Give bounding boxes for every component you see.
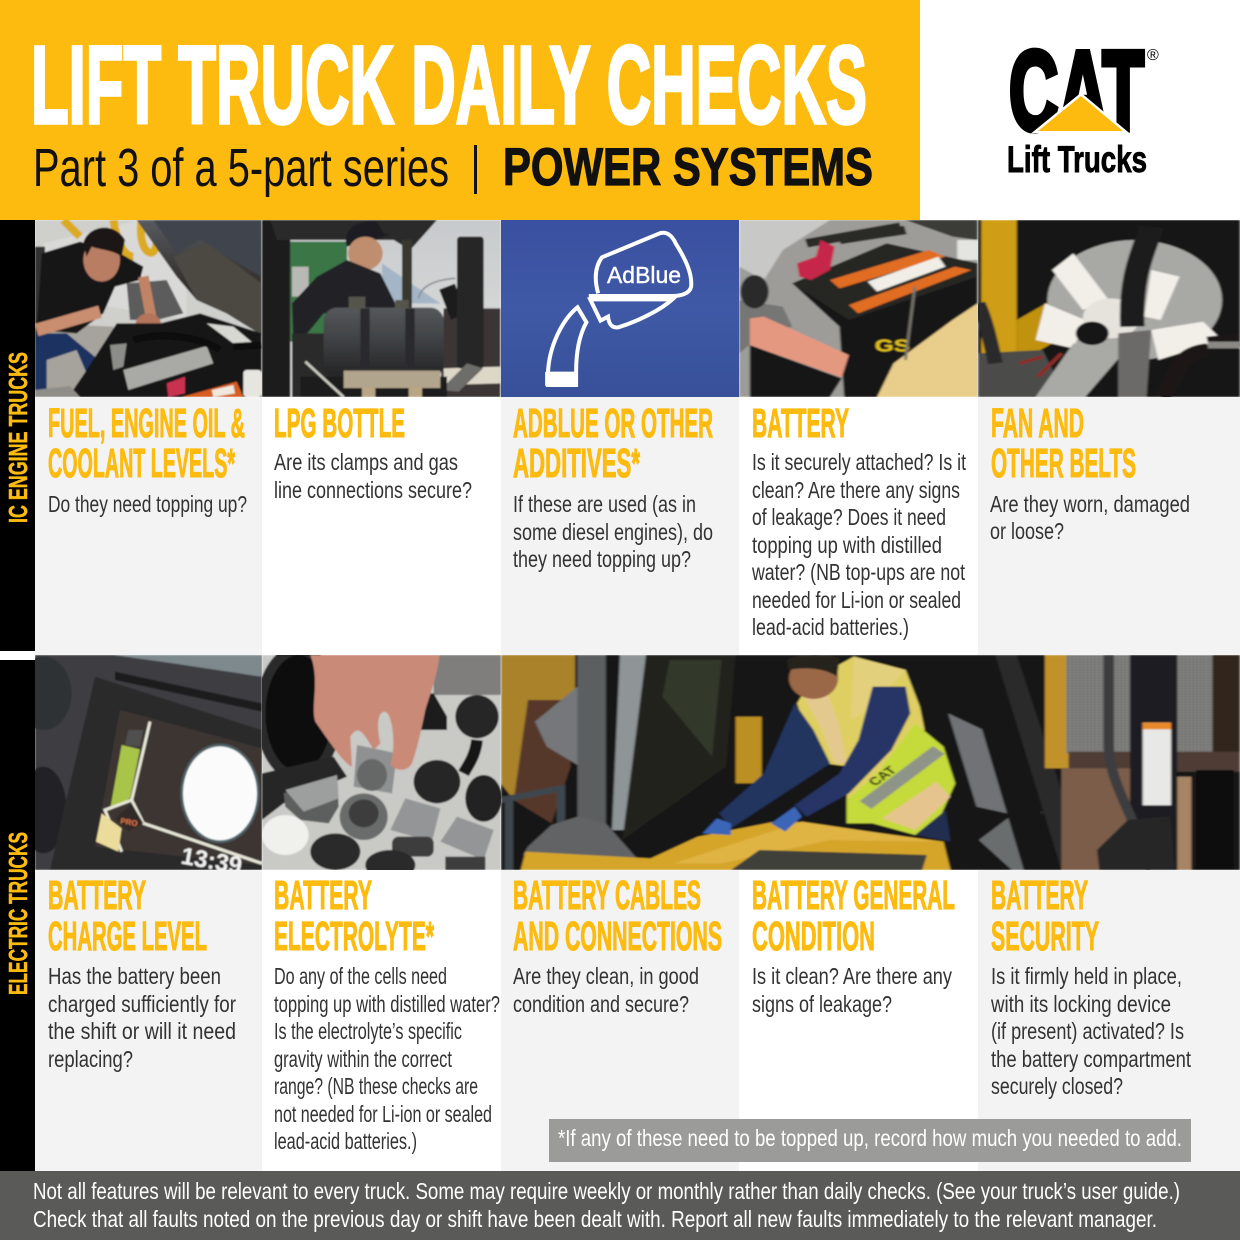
panel: fuel, engine oil and coolant levels: COOLANT LEVELS*: [48, 440, 235, 486]
panel: battery electrolyte: [274, 872, 500, 1154]
panel: battery security: SECURITY: [991, 913, 1099, 959]
panel: battery cables and connections: AND CONNECTIONS: [513, 913, 722, 959]
subtitle: series part: Part 3 of a 5-part series: [33, 138, 449, 198]
panel: battery charge level: CHARGE LEVEL: [48, 913, 207, 959]
logo triangle: [1038, 96, 1123, 131]
panel: battery charge level: Has the battery been: [48, 963, 221, 989]
panel: fuel, engine oil and coolant levels: Do they need topping up?: [48, 491, 247, 517]
panel: battery security: BATTERY: [991, 872, 1088, 918]
panel: AdBlue or other additives: ADBLUE OR OTHER: [513, 400, 713, 446]
panel: battery charge level: [48, 872, 236, 1072]
panel: AdBlue or other additives: If these are used (as in: [513, 491, 696, 517]
panel: battery security: the battery compartment: [991, 1046, 1191, 1072]
photo: battery charge display: [35, 655, 262, 880]
photo: battery charge display: 13:39: [179, 843, 244, 880]
registered mark: ®: [1147, 47, 1159, 64]
panel: AdBlue or other additives: they need topping up?: [513, 546, 691, 572]
photo: driver beside LPG bottle: [262, 220, 501, 397]
panel: battery cables and connections: condition and secure?: [513, 991, 689, 1017]
icon: filler spout: [548, 307, 586, 385]
icon: AdBlue jug body: [589, 233, 691, 296]
panel: battery cables and connections: Are they clean, in good: [513, 963, 699, 989]
panel: battery security: with its locking device: [990, 991, 1171, 1017]
panel: battery electrolyte: gravity within the correct: [274, 1046, 452, 1072]
panel: battery security: (if present) activated? Is: [991, 1018, 1184, 1044]
photo: worker checking battery cables (wide): [501, 655, 1240, 870]
photo: lead-acid battery in engine bay: [739, 220, 978, 397]
panel: text cells, IC engine row: FUEL, ENGINE OIL &: [48, 400, 245, 446]
panel: battery: clean? Are there any signs: [752, 477, 960, 503]
icon text: AdBlue: AdBlue: [607, 262, 681, 288]
panel: battery: BATTERY: [752, 400, 849, 446]
photo: technician checking engine levels: [35, 220, 262, 397]
panel: battery charge level: replacing?: [48, 1046, 133, 1072]
photo: lead-acid battery in engine bay: GS: [875, 337, 910, 356]
panel: AdBlue or other additives: ADDITIVES*: [513, 440, 640, 486]
panel: battery charge level: the shift or will it need: [48, 1018, 236, 1044]
panel: battery: topping up with distilled: [752, 532, 942, 558]
panel: battery electrolyte: Do any of the cells need: [274, 963, 447, 989]
panel: LPG bottle: LPG BOTTLE: [274, 400, 405, 446]
panel: battery electrolyte: ELECTROLYTE*: [274, 913, 434, 959]
panel: battery: needed for Li-ion or sealed: [752, 587, 961, 613]
photo: radiator fan and engine belts: [978, 220, 1240, 397]
panel: battery: water? (NB top-ups are not: [751, 559, 965, 585]
photo: AdBlue pump icon on blue: [501, 220, 739, 397]
panel: battery cables and connections: [513, 872, 722, 1017]
logo text Lift Trucks: Lift Trucks: [1007, 139, 1147, 180]
panel: text cells, IC engine row: [35, 397, 1240, 655]
panel: battery charge level: charged sufficiently for: [48, 991, 236, 1017]
panel: battery charge level: BATTERY: [48, 872, 146, 918]
panel: LPG bottle: [274, 400, 472, 503]
panel: fuel, engine oil and coolant levels: [48, 400, 247, 517]
panel: battery: [751, 400, 966, 640]
panel: fan and other belts: [990, 400, 1190, 544]
logo wordmark CAT: CAT: [1009, 28, 1144, 154]
panel: battery cables and connections: BATTERY CABLES: [513, 872, 701, 918]
icon: jug neck: [590, 299, 672, 328]
panel: battery security: Is it firmly held in place,: [991, 963, 1182, 989]
panel: battery electrolyte: lead-acid batteries.): [274, 1128, 417, 1154]
panel: AdBlue or other additives: some diesel engines), do: [513, 519, 713, 545]
panel: fan and other belts: Are they worn, damaged: [990, 491, 1190, 517]
panel: battery general condition: CONDITION: [752, 913, 875, 959]
panel: fan and other belts: or loose?: [990, 518, 1064, 544]
panel: battery electrolyte: topping up with distilled water?: [274, 991, 500, 1017]
side label: electric trucks: ELECTRIC TRUCKS: [3, 832, 33, 995]
logo panel: Cat Lift Trucks: [920, 0, 1240, 220]
panel: battery electrolyte: Is the electrolyte’s specific: [274, 1018, 462, 1044]
panel: battery electrolyte: range? (NB these checks are: [274, 1073, 478, 1099]
subtitle: power systems: POWER SYSTEMS: [503, 138, 873, 197]
panel: battery security: securely closed?: [991, 1073, 1123, 1099]
panel: battery general condition: Is it clean? Are there any: [752, 963, 952, 989]
panel: battery security: [990, 872, 1191, 1099]
panel: battery electrolyte: not needed for Li-ion or sealed: [274, 1101, 492, 1127]
panel: battery: lead-acid batteries.): [752, 614, 909, 640]
panel: battery general condition: signs of leakage?: [752, 991, 892, 1017]
photo: worker checking battery cables (wide): CAT: [864, 763, 900, 788]
side label: electric trucks: [0, 660, 35, 1171]
side label: IC engine trucks: [0, 220, 35, 651]
side label: IC engine trucks: IC ENGINE TRUCKS: [3, 352, 33, 523]
panel: battery general condition: [752, 872, 955, 1017]
panel: LPG bottle: line connections secure?: [274, 477, 472, 503]
panel: battery: of leakage? Does it need: [752, 504, 946, 530]
photo: hand opening battery electrolyte cap: [262, 655, 501, 870]
photo: battery charge display: PRO: [120, 816, 138, 828]
panel: fan and other belts: FAN AND: [991, 400, 1084, 446]
subtitle divider: [474, 145, 477, 194]
footer note: [0, 1171, 1240, 1240]
callout: topping-up note: [549, 1119, 1191, 1162]
panel: LPG bottle: Are its clamps and gas: [274, 449, 458, 475]
panel: battery electrolyte: BATTERY: [274, 872, 372, 918]
panel: text cells, electric row: [35, 870, 1240, 1171]
panel: AdBlue or other additives: [513, 400, 713, 572]
panel: battery general condition: BATTERY GENERAL: [752, 872, 955, 918]
panel: battery: Is it securely attached? Is it: [752, 449, 966, 475]
header banner: [0, 0, 920, 220]
